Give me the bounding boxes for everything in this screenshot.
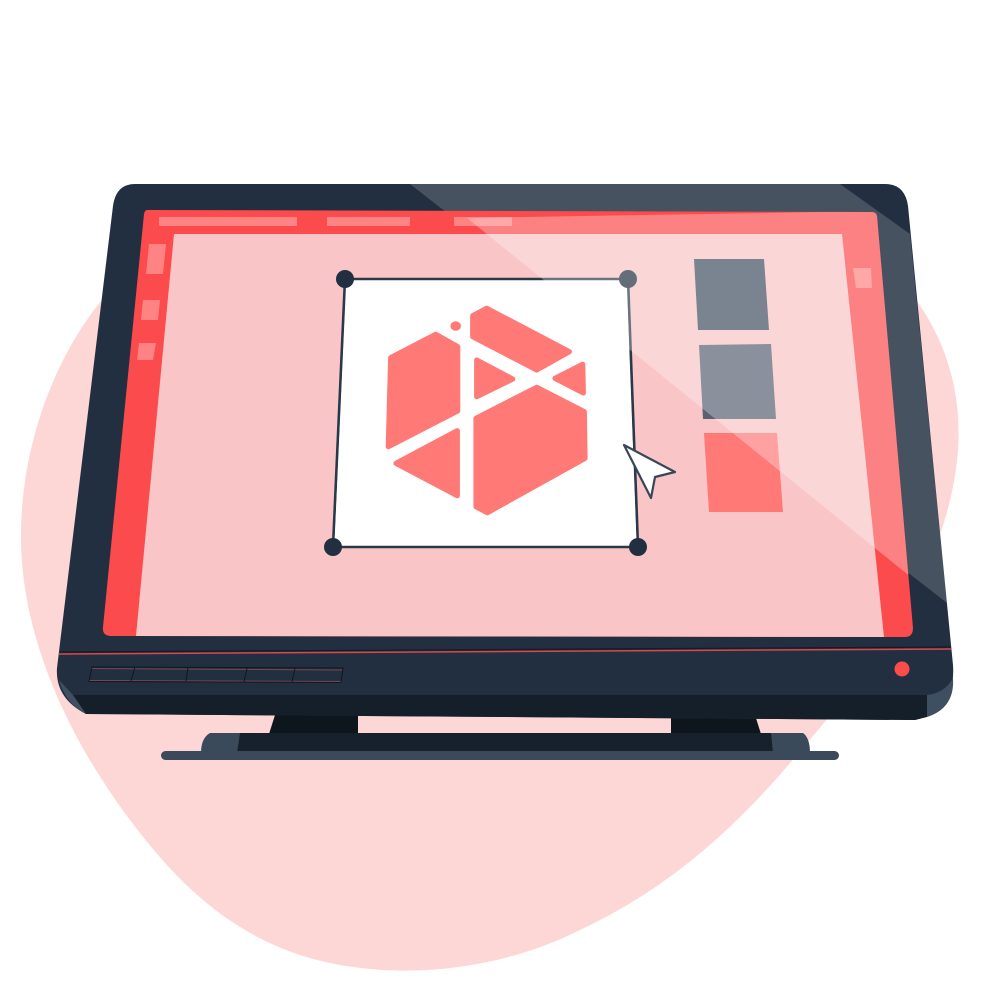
- bottom dark strip: [73, 695, 927, 720]
- logo piece top: [473, 308, 569, 370]
- logo piece centre: [477, 360, 513, 397]
- corner handle top left: [336, 270, 354, 288]
- left toolbar icons: [137, 244, 166, 360]
- power LED: [894, 662, 910, 676]
- monitor body: [57, 184, 953, 720]
- red line: [59, 649, 951, 654]
- artboard sheet: [334, 280, 636, 546]
- logo piece bottom left: [396, 431, 457, 496]
- shadow line: [60, 647, 951, 652]
- swatches: [694, 259, 783, 512]
- bottom left corner highlight: [59, 680, 86, 714]
- logo piece left: [388, 334, 458, 447]
- stand: [161, 715, 839, 760]
- background blob: [21, 280, 959, 971]
- corner handle top right: [619, 270, 637, 288]
- swatch 3: [704, 433, 783, 512]
- stand foot dark: [237, 733, 773, 753]
- screen glare: [467, 211, 912, 578]
- corner handle bottom right: [629, 538, 647, 556]
- stand neck left: [269, 715, 358, 734]
- top menu items: [159, 217, 512, 226]
- bottom right corner highlight: [927, 678, 953, 717]
- bezel reflection: [410, 184, 947, 603]
- bezel: [57, 184, 953, 720]
- logo dot: [453, 324, 458, 328]
- artboard outline: [333, 279, 638, 547]
- screen frame: [103, 210, 913, 637]
- stand base bar: [161, 751, 839, 760]
- cursor arrow: [624, 445, 675, 498]
- swatch 2: [699, 344, 776, 419]
- corner handle bottom left: [324, 538, 342, 556]
- logo: [388, 308, 585, 513]
- stand foot cap: [201, 733, 810, 753]
- right toolbar icon: [853, 268, 872, 288]
- stand neck right: [671, 715, 761, 734]
- keypad buttons: [89, 667, 343, 682]
- screen canvas: [136, 234, 884, 637]
- swatch 1: [694, 259, 769, 330]
- logo piece right: [555, 364, 583, 393]
- logo piece large: [476, 387, 585, 513]
